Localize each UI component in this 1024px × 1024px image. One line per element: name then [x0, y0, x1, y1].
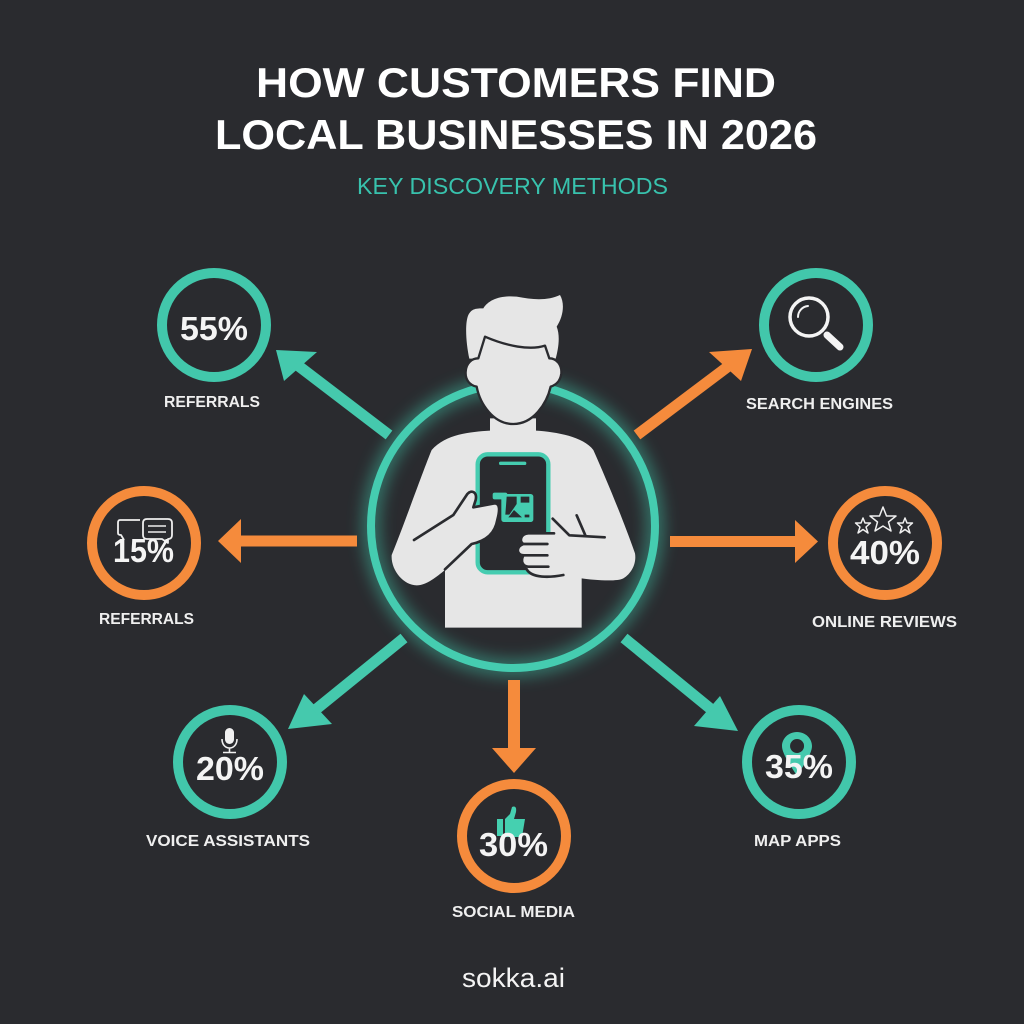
stat: 20% voice assistants: 20% [196, 750, 264, 787]
stat: search engines: SEARCH ENGINES [746, 396, 893, 413]
subtitle: KEY DISCOVERY METHODS [357, 173, 668, 199]
arrow: to map apps [624, 638, 738, 731]
stat: 15% referrals: 15% [113, 532, 174, 569]
stat: 30% social media: 30% [479, 826, 548, 863]
arrow: to online reviews [670, 520, 818, 563]
phone [478, 454, 548, 572]
icon: microphone [222, 728, 237, 752]
icon: three stars [856, 507, 912, 533]
stat: 35% map apps: 35% [765, 748, 833, 785]
stat: 40% online reviews [812, 491, 957, 631]
head [466, 337, 561, 424]
body [392, 418, 635, 628]
arrow: to social media [492, 680, 536, 773]
stat: 20% voice assistants: VOICE ASSISTANTS [146, 833, 310, 850]
icon: thumbs up [497, 807, 525, 837]
title: LOCAL BUSINESSES IN 2026 [215, 111, 817, 158]
title [215, 59, 817, 158]
right hand [518, 515, 613, 577]
stat: 30% social media: SOCIAL MEDIA [452, 904, 575, 921]
icon: map pin [782, 732, 812, 776]
arrow: to search engines [637, 349, 752, 435]
stat: 15% referrals [92, 491, 196, 628]
stat: 15% referrals: REFERRALS [99, 611, 194, 628]
stat: 35% map apps: MAP APPS [754, 833, 841, 850]
icon: magnifying glass [790, 298, 840, 347]
central person holding phone [392, 295, 635, 628]
stat: search engines [746, 273, 893, 413]
title: HOW CUSTOMERS FIND [256, 59, 776, 106]
icon: speech bubbles [118, 519, 172, 543]
stat: 55% referrals: 55% [180, 310, 248, 347]
arrow: to voice assistants [288, 638, 404, 729]
hair [466, 295, 563, 360]
footer brand: sokka.ai [462, 963, 565, 993]
stat: 35% map apps [747, 710, 851, 850]
stat: 55% referrals: REFERRALS [164, 394, 260, 411]
arrow: to 55% referrals [276, 350, 389, 435]
stat: 20% voice assistants [146, 710, 310, 850]
arrow: to 15% referrals [218, 519, 357, 563]
stat: 55% referrals [162, 273, 266, 411]
stat: 30% social media [452, 784, 575, 921]
stat: 40% online reviews: 40% [850, 534, 920, 571]
left hand [414, 492, 499, 569]
central glowing ring [371, 384, 655, 668]
stat: 40% online reviews: ONLINE REVIEWS [812, 614, 957, 631]
